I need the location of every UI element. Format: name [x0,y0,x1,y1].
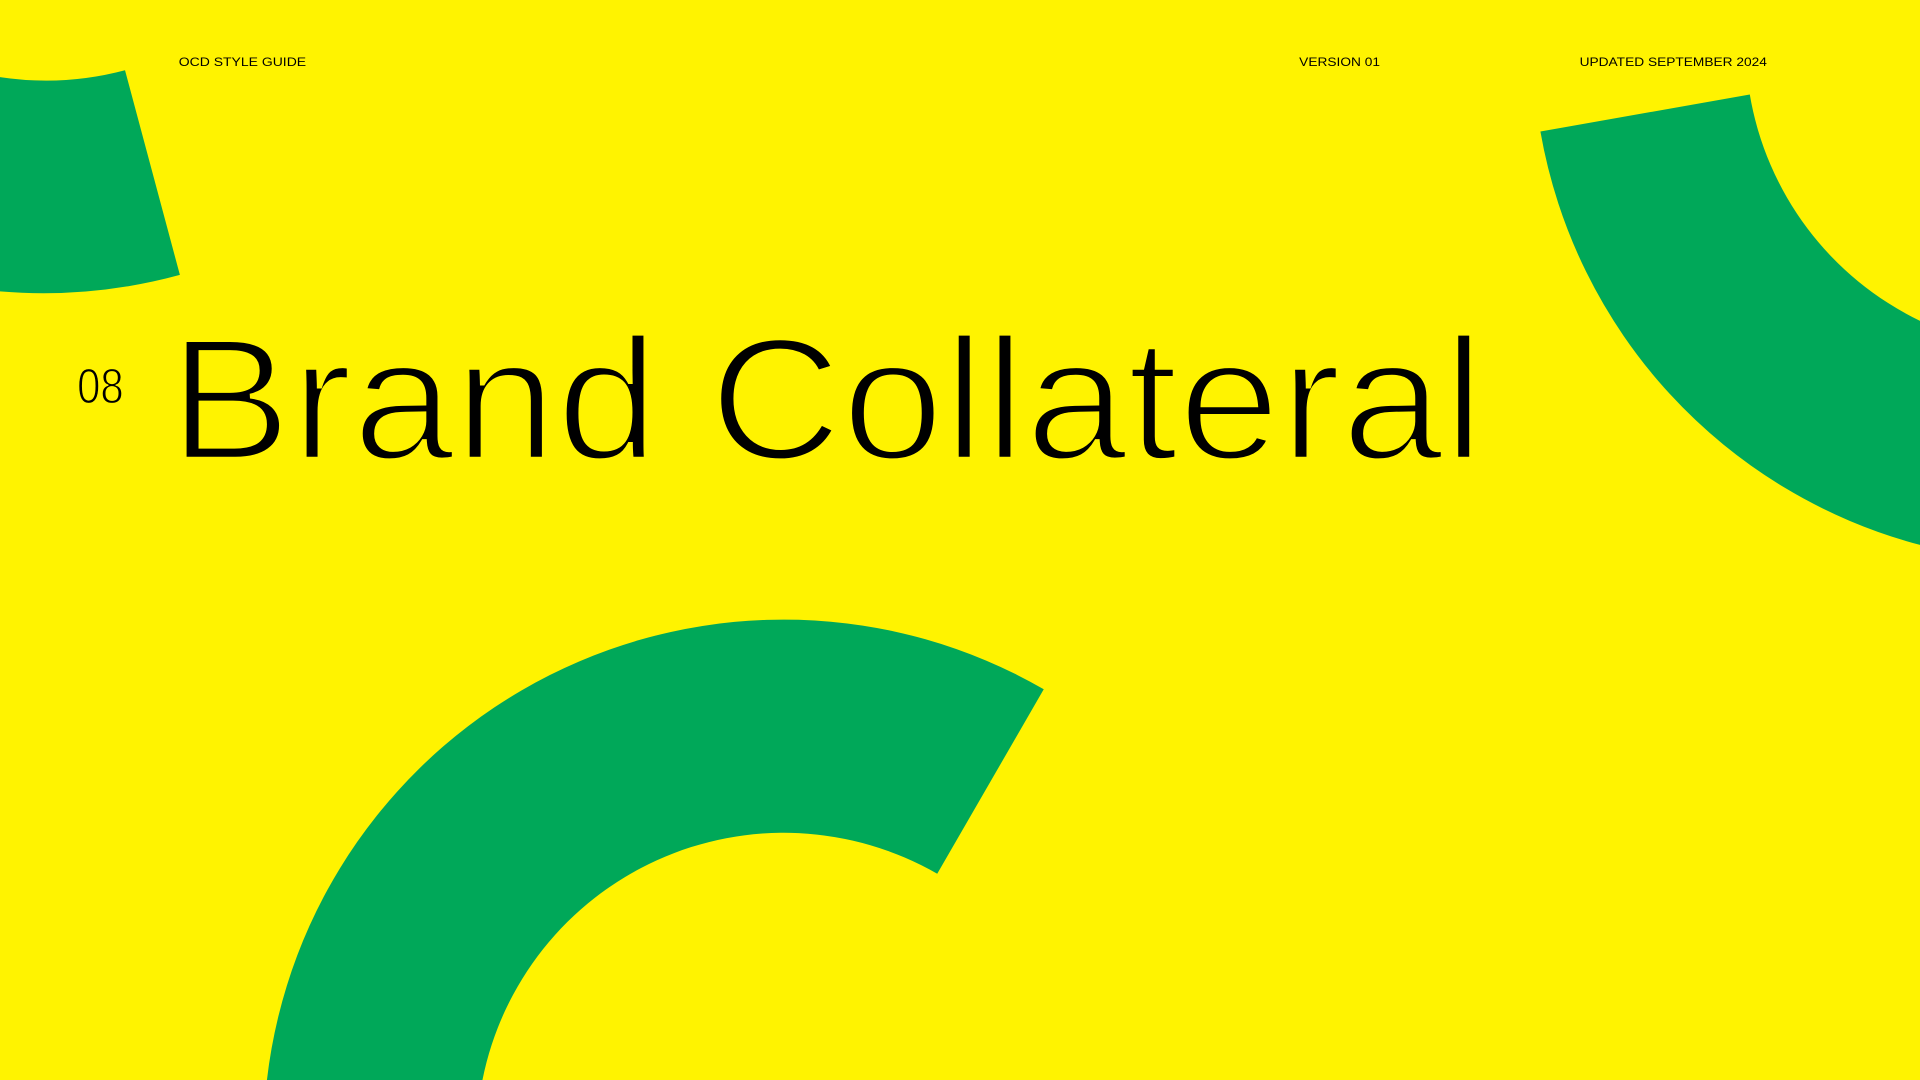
header: style guide label: OCD STYLE GUIDE [179,55,306,69]
section number: 08 [77,360,124,414]
header: updated date: UPDATED SEPTEMBER 2024 [1580,55,1767,69]
arc: top-left green ring segment [0,70,180,293]
header: version: VERSION 01 [1299,55,1380,69]
arc: top-right green ring segment [1540,95,1920,545]
arc: bottom green ring segment [267,620,1044,1080]
title: Brand Collateral [169,302,1484,496]
